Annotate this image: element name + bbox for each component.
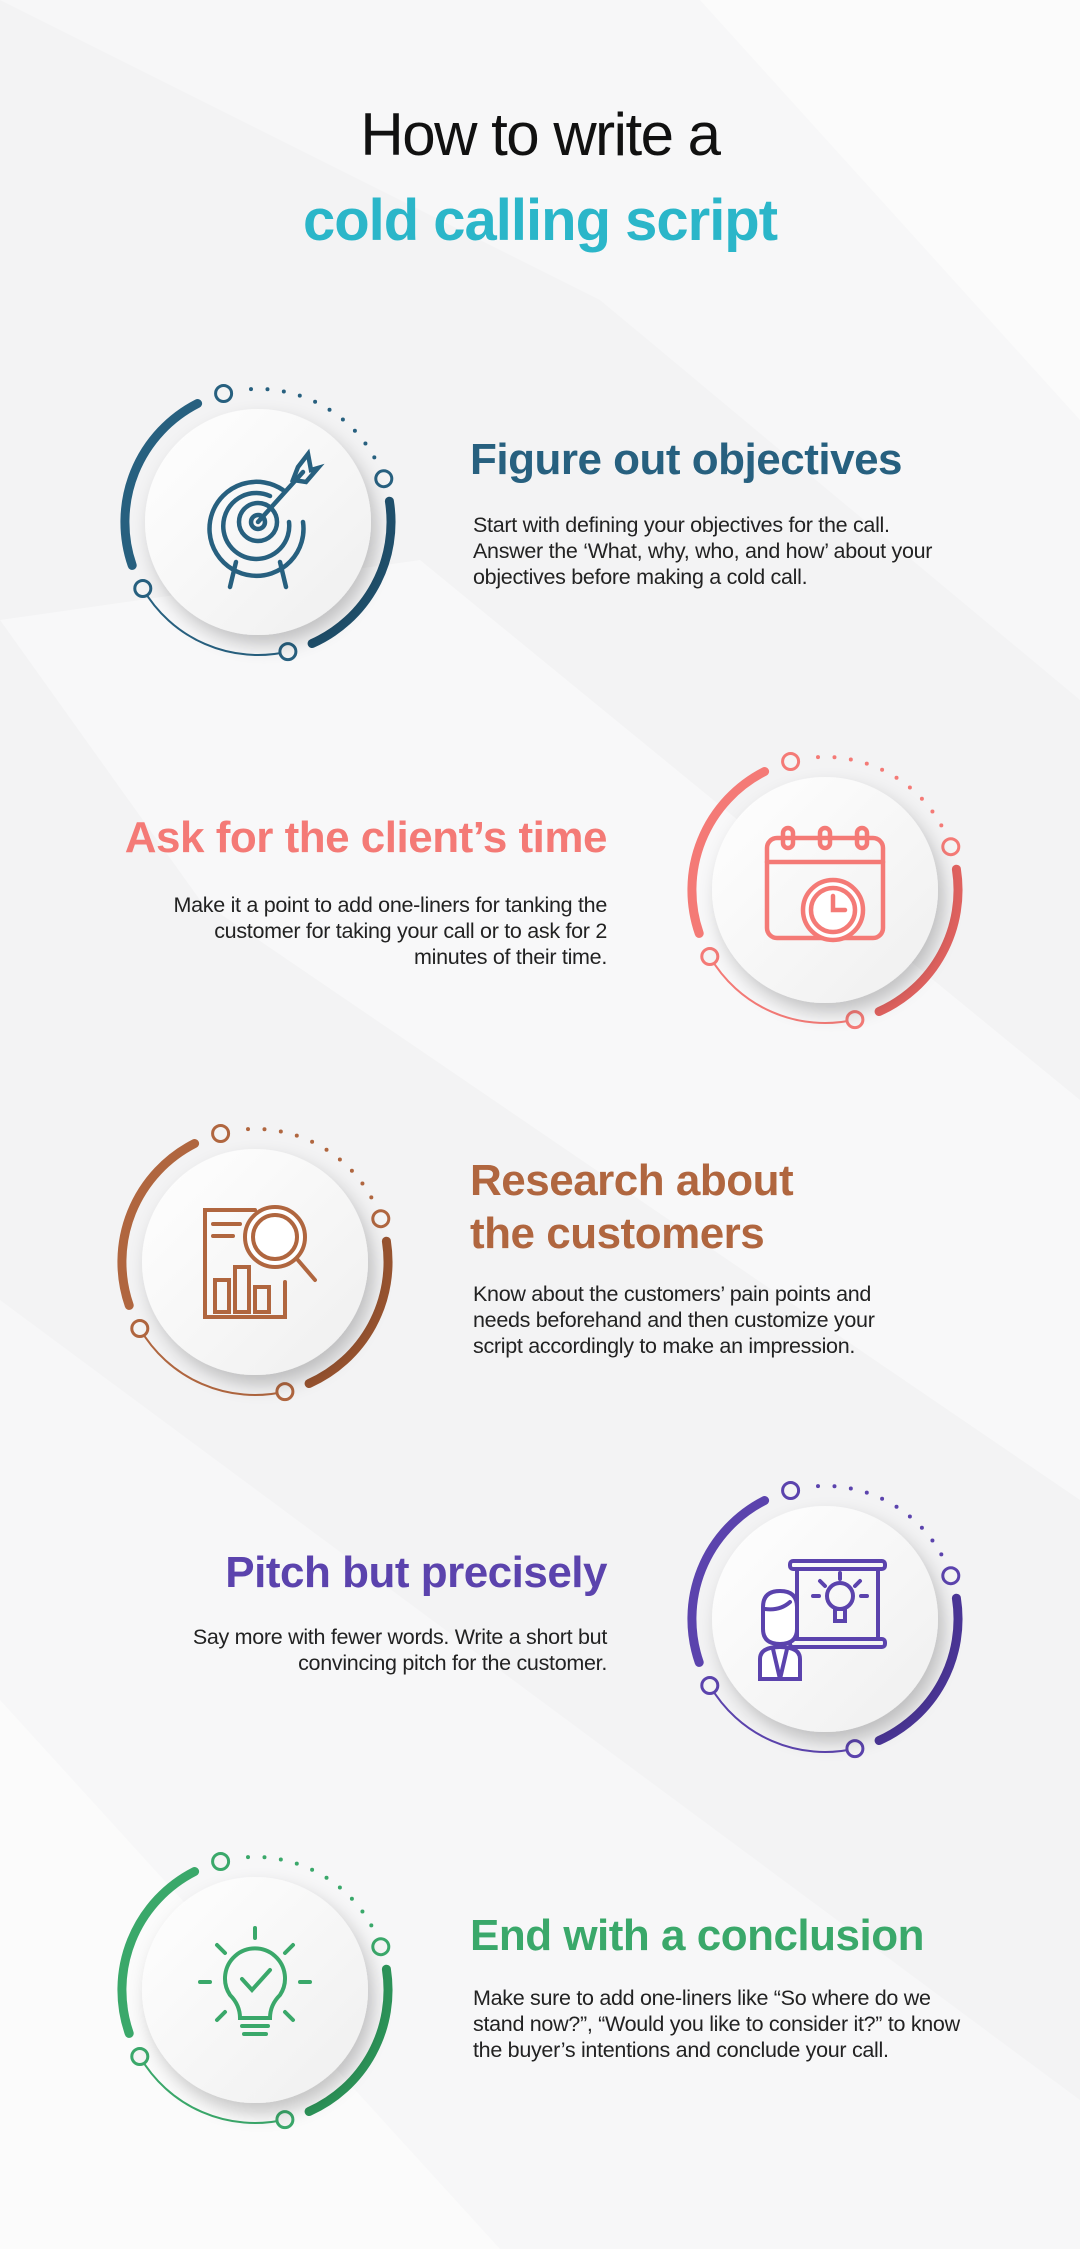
text: stand now?”, “Would you like to consider it?” to know [473,2012,960,2036]
icon ring: presenter [687,1481,963,1758]
icon ring: calendar [687,752,963,1030]
panel: figure out objectives [120,384,932,662]
panel: research about the customers [117,1124,875,1402]
panel: end with a conclusion [117,1852,960,2130]
heading: Ask for the client’s time [125,813,607,862]
heading: End with a conclusion [470,1911,924,1960]
title [303,101,778,253]
heading: the customers [470,1209,764,1258]
text: the buyer’s intentions and conclude your call. [473,2038,889,2062]
icon ring: target [120,384,396,662]
text [473,1282,875,1358]
text: script accordingly to make an impression. [473,1334,855,1358]
text [193,1625,608,1675]
text: Say more with fewer words. Write a short but [193,1625,607,1649]
text: Answer the ‘What, why, who, and how’ about your [473,539,932,563]
text: Make it a point to add one-liners for tanking the [174,893,607,917]
text: Start with defining your objectives for the call. [473,513,890,537]
text [473,513,932,589]
heading: Figure out objectives [470,435,902,484]
text [473,1986,960,2062]
title: cold calling script [303,188,777,253]
text: needs beforehand and then customize your [473,1308,875,1332]
heading: Pitch but precisely [225,1548,607,1597]
panel: ask for the client's time [125,752,963,1030]
title: How to write a [360,101,720,168]
text: Know about the customers’ pain points and [473,1282,871,1306]
icon ring: research [117,1124,393,1402]
text: Make sure to add one-liners like “So where do we [473,1986,931,2010]
panel: pitch but precisely [193,1481,963,1758]
text: minutes of their time. [414,945,607,969]
icon ring: bulb [117,1852,393,2130]
heading: Research about [470,1156,793,1205]
text [174,893,607,969]
text: objectives before making a cold call. [473,565,807,589]
heading [470,1156,794,1258]
text: customer for taking your call or to ask for 2 [214,919,607,943]
text: convincing pitch for the customer. [298,1651,607,1675]
